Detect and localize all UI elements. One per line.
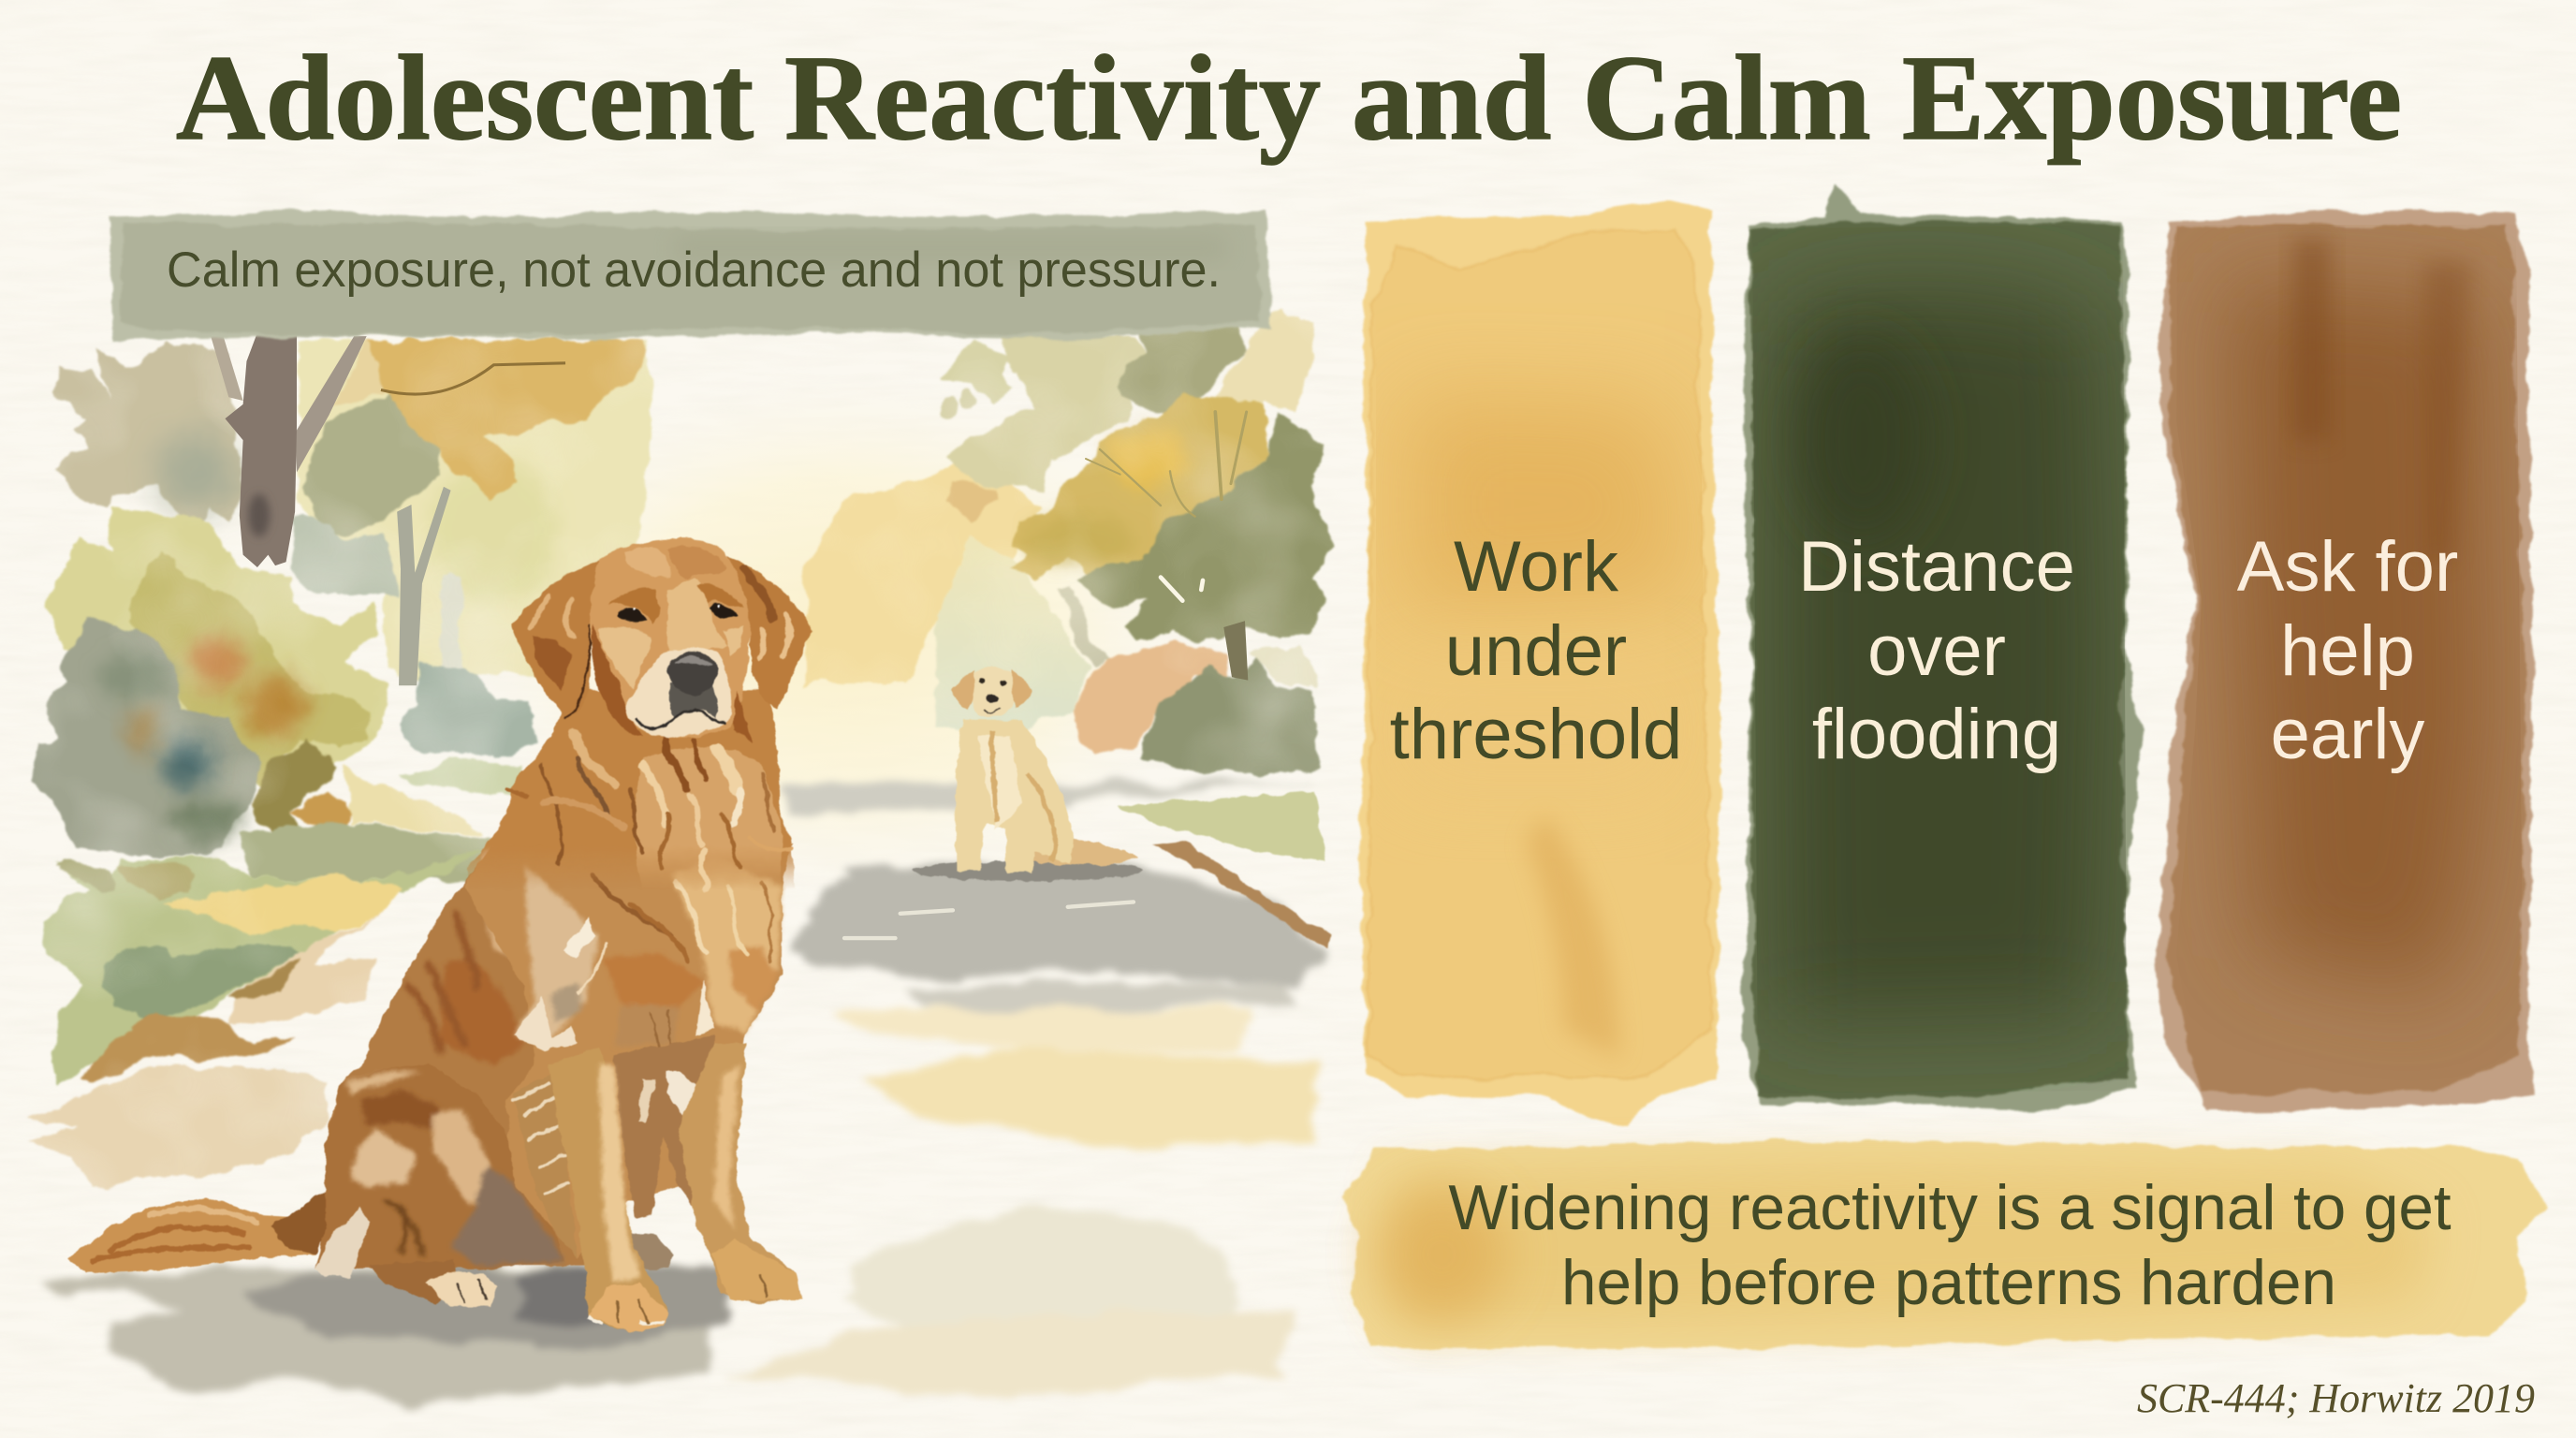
ruff [468, 690, 796, 889]
background glow [468, 374, 1217, 899]
label: distance over flooding: over [1867, 611, 2006, 691]
label: ask for help early: help [2280, 611, 2415, 691]
illustration: calm dog in autumn park with distant dog [28, 309, 1332, 1404]
far dog head [969, 667, 1017, 716]
label: distance over flooding: Distance [1798, 527, 2075, 607]
right ear [727, 555, 812, 709]
chest [463, 843, 793, 1258]
right trees [805, 309, 1332, 774]
label: ask for help early: early [2271, 695, 2424, 774]
banner text: Calm exposure, not avoidance and not pressure. [167, 242, 1221, 298]
left ear [512, 562, 599, 718]
near front leg [549, 1047, 667, 1331]
citation: SCR-444; Horwitz 2019 [2137, 1375, 2535, 1421]
eyes [617, 608, 647, 623]
callout text: Widening reactivity is a signal to get [1448, 1173, 2452, 1243]
road highlights [844, 902, 1134, 938]
far front leg [678, 1043, 801, 1303]
fringe between legs [614, 1036, 714, 1219]
left trees [32, 340, 651, 880]
callout: widening reactivity [1340, 1140, 2546, 1348]
panel: ask for help early [2157, 212, 2533, 1110]
panel: distance over flooding [1743, 187, 2142, 1110]
label: ask for help early: Ask for [2237, 527, 2458, 607]
left tree trunks [211, 332, 565, 685]
head and ruff [468, 538, 812, 889]
muzzle [625, 648, 731, 738]
path and ground washes [723, 781, 1325, 1397]
far dog [912, 667, 1142, 881]
right tree details [1086, 412, 1248, 681]
banner: calm exposure [109, 212, 1271, 341]
back [326, 843, 590, 1266]
main dog shadow [50, 1262, 738, 1404]
head [590, 538, 751, 738]
tail and haunch [67, 843, 590, 1307]
far dog body [956, 720, 1073, 873]
panel: work under threshold [1359, 200, 1720, 1125]
chest and legs [463, 843, 801, 1331]
feather left of leg [513, 1072, 578, 1258]
title: Adolescent Reactivity and Calm Exposure [176, 31, 2402, 166]
label: distance over flooding: flooding [1812, 695, 2061, 774]
label: work under threshold: under [1445, 611, 1627, 691]
ground and grass [28, 850, 487, 1186]
nose [666, 652, 718, 695]
far dog tail [1027, 835, 1138, 866]
main dog [67, 538, 812, 1331]
label: work under threshold: Work [1454, 527, 1619, 607]
far hind paw [632, 1233, 675, 1269]
haunch [315, 1064, 565, 1269]
far dog shadow [912, 861, 1142, 881]
callout text: help before patterns harden [1561, 1248, 2336, 1318]
label: work under threshold: threshold [1390, 695, 1682, 774]
brown roadside edge [1117, 792, 1331, 949]
